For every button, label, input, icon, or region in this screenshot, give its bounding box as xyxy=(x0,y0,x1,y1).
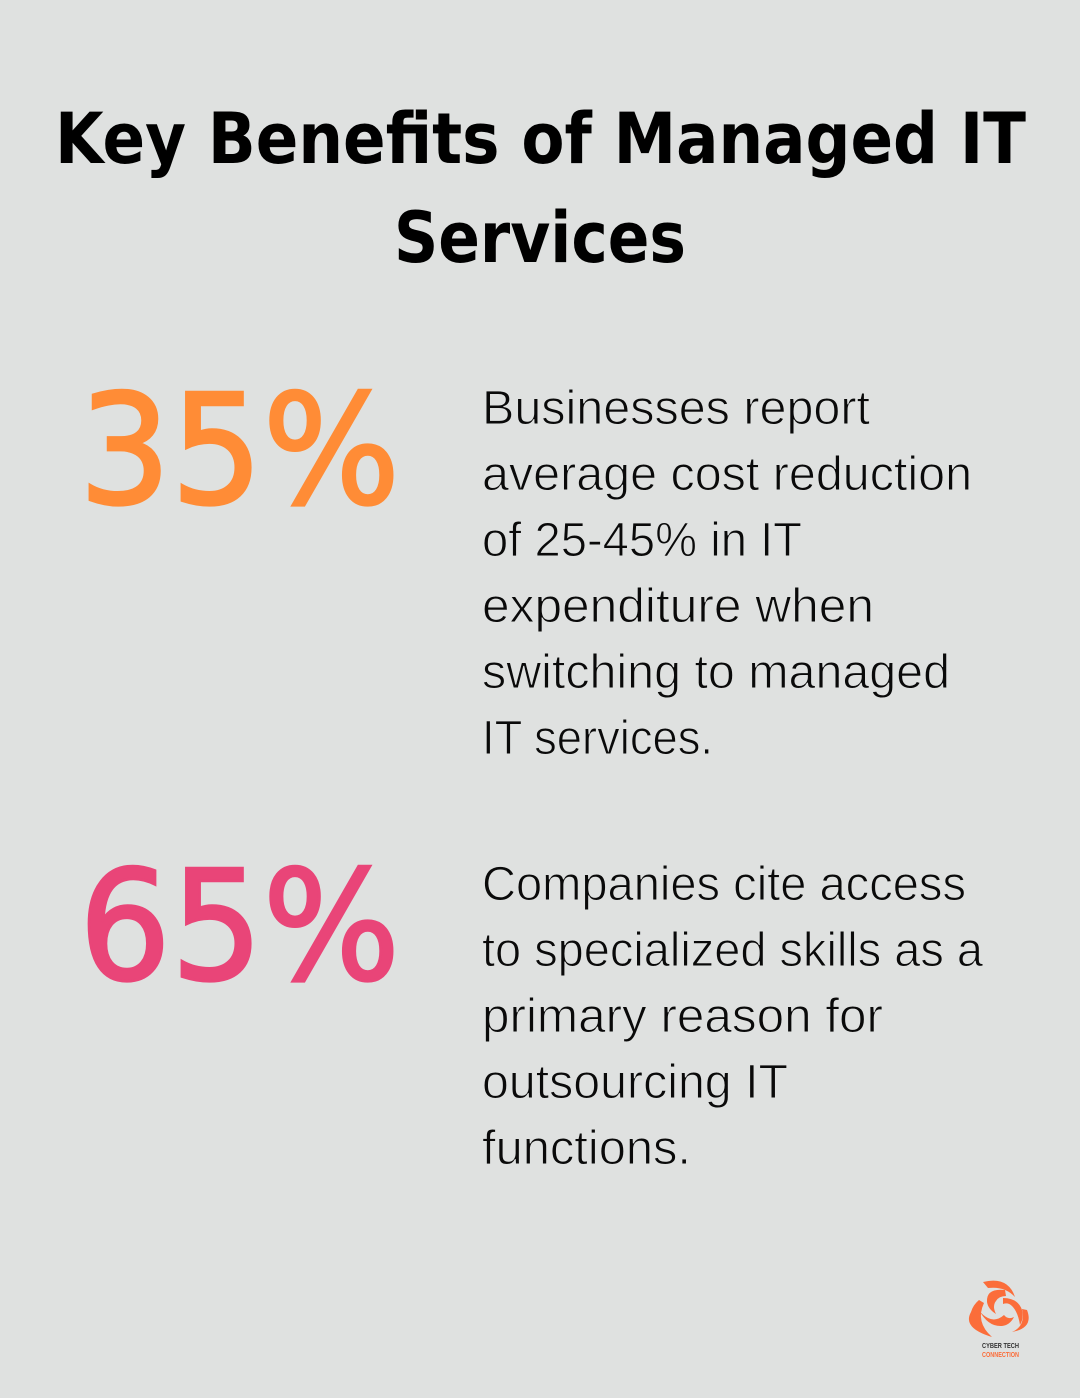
text block: specialized skills: to specialized skills as a xyxy=(482,924,983,977)
text block: cost reduction: IT services. xyxy=(482,712,713,765)
text block: specialized skills: outsourcing IT xyxy=(482,1056,788,1109)
text block: cost reduction xyxy=(482,382,972,765)
text block: cost reduction: expenditure when xyxy=(482,580,874,633)
text block: cost reduction: of 25-45% in IT xyxy=(482,514,802,567)
text block: cost reduction: switching to managed xyxy=(482,646,950,699)
text block: specialized skills: functions. xyxy=(482,1122,691,1175)
logo: Cyber Tech Connection xyxy=(969,1281,1029,1359)
logo wordmark: CONNECTION xyxy=(982,1352,1019,1359)
title: Services xyxy=(394,197,686,279)
logo wordmark xyxy=(982,1343,1019,1359)
text block: specialized skills: primary reason for xyxy=(482,990,883,1043)
text block: cost reduction: average cost reduction xyxy=(482,448,972,501)
statistic: 35%: 35% xyxy=(79,362,400,539)
logo wordmark: CYBER TECH xyxy=(982,1343,1019,1350)
icon: swirl mark xyxy=(969,1281,1029,1337)
title xyxy=(55,98,1026,279)
text block: cost reduction: Businesses report xyxy=(482,382,870,435)
statistic: 65%: 65% xyxy=(79,838,400,1015)
text block: specialized skills: Companies cite access xyxy=(482,858,966,911)
text block: specialized skills xyxy=(482,858,983,1175)
